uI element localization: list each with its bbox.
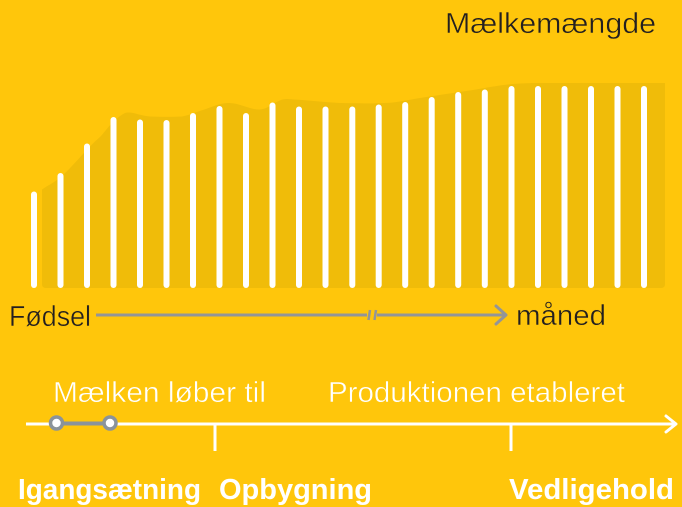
area: milk amount curve [42, 83, 665, 288]
phase label: maintenance: Vedligehold [509, 474, 674, 506]
label: month: måned [516, 300, 606, 332]
bars: monthly milk yield [34, 89, 644, 285]
lactation chart [34, 83, 665, 288]
phase label: build-up: Opbygning [219, 474, 372, 506]
marker: initiation period [50, 417, 116, 429]
phase label: initiation: Igangsætning [18, 474, 201, 506]
arrow: lactation timeline [26, 416, 676, 451]
arrow: time axis [96, 306, 506, 324]
label: milk let-down: Mælken løber til [53, 377, 266, 409]
label: production established: Produktionen etableret [328, 377, 625, 409]
title: milk amount: Mælkemængde [445, 8, 656, 40]
label: birth: Fødsel [9, 301, 91, 333]
